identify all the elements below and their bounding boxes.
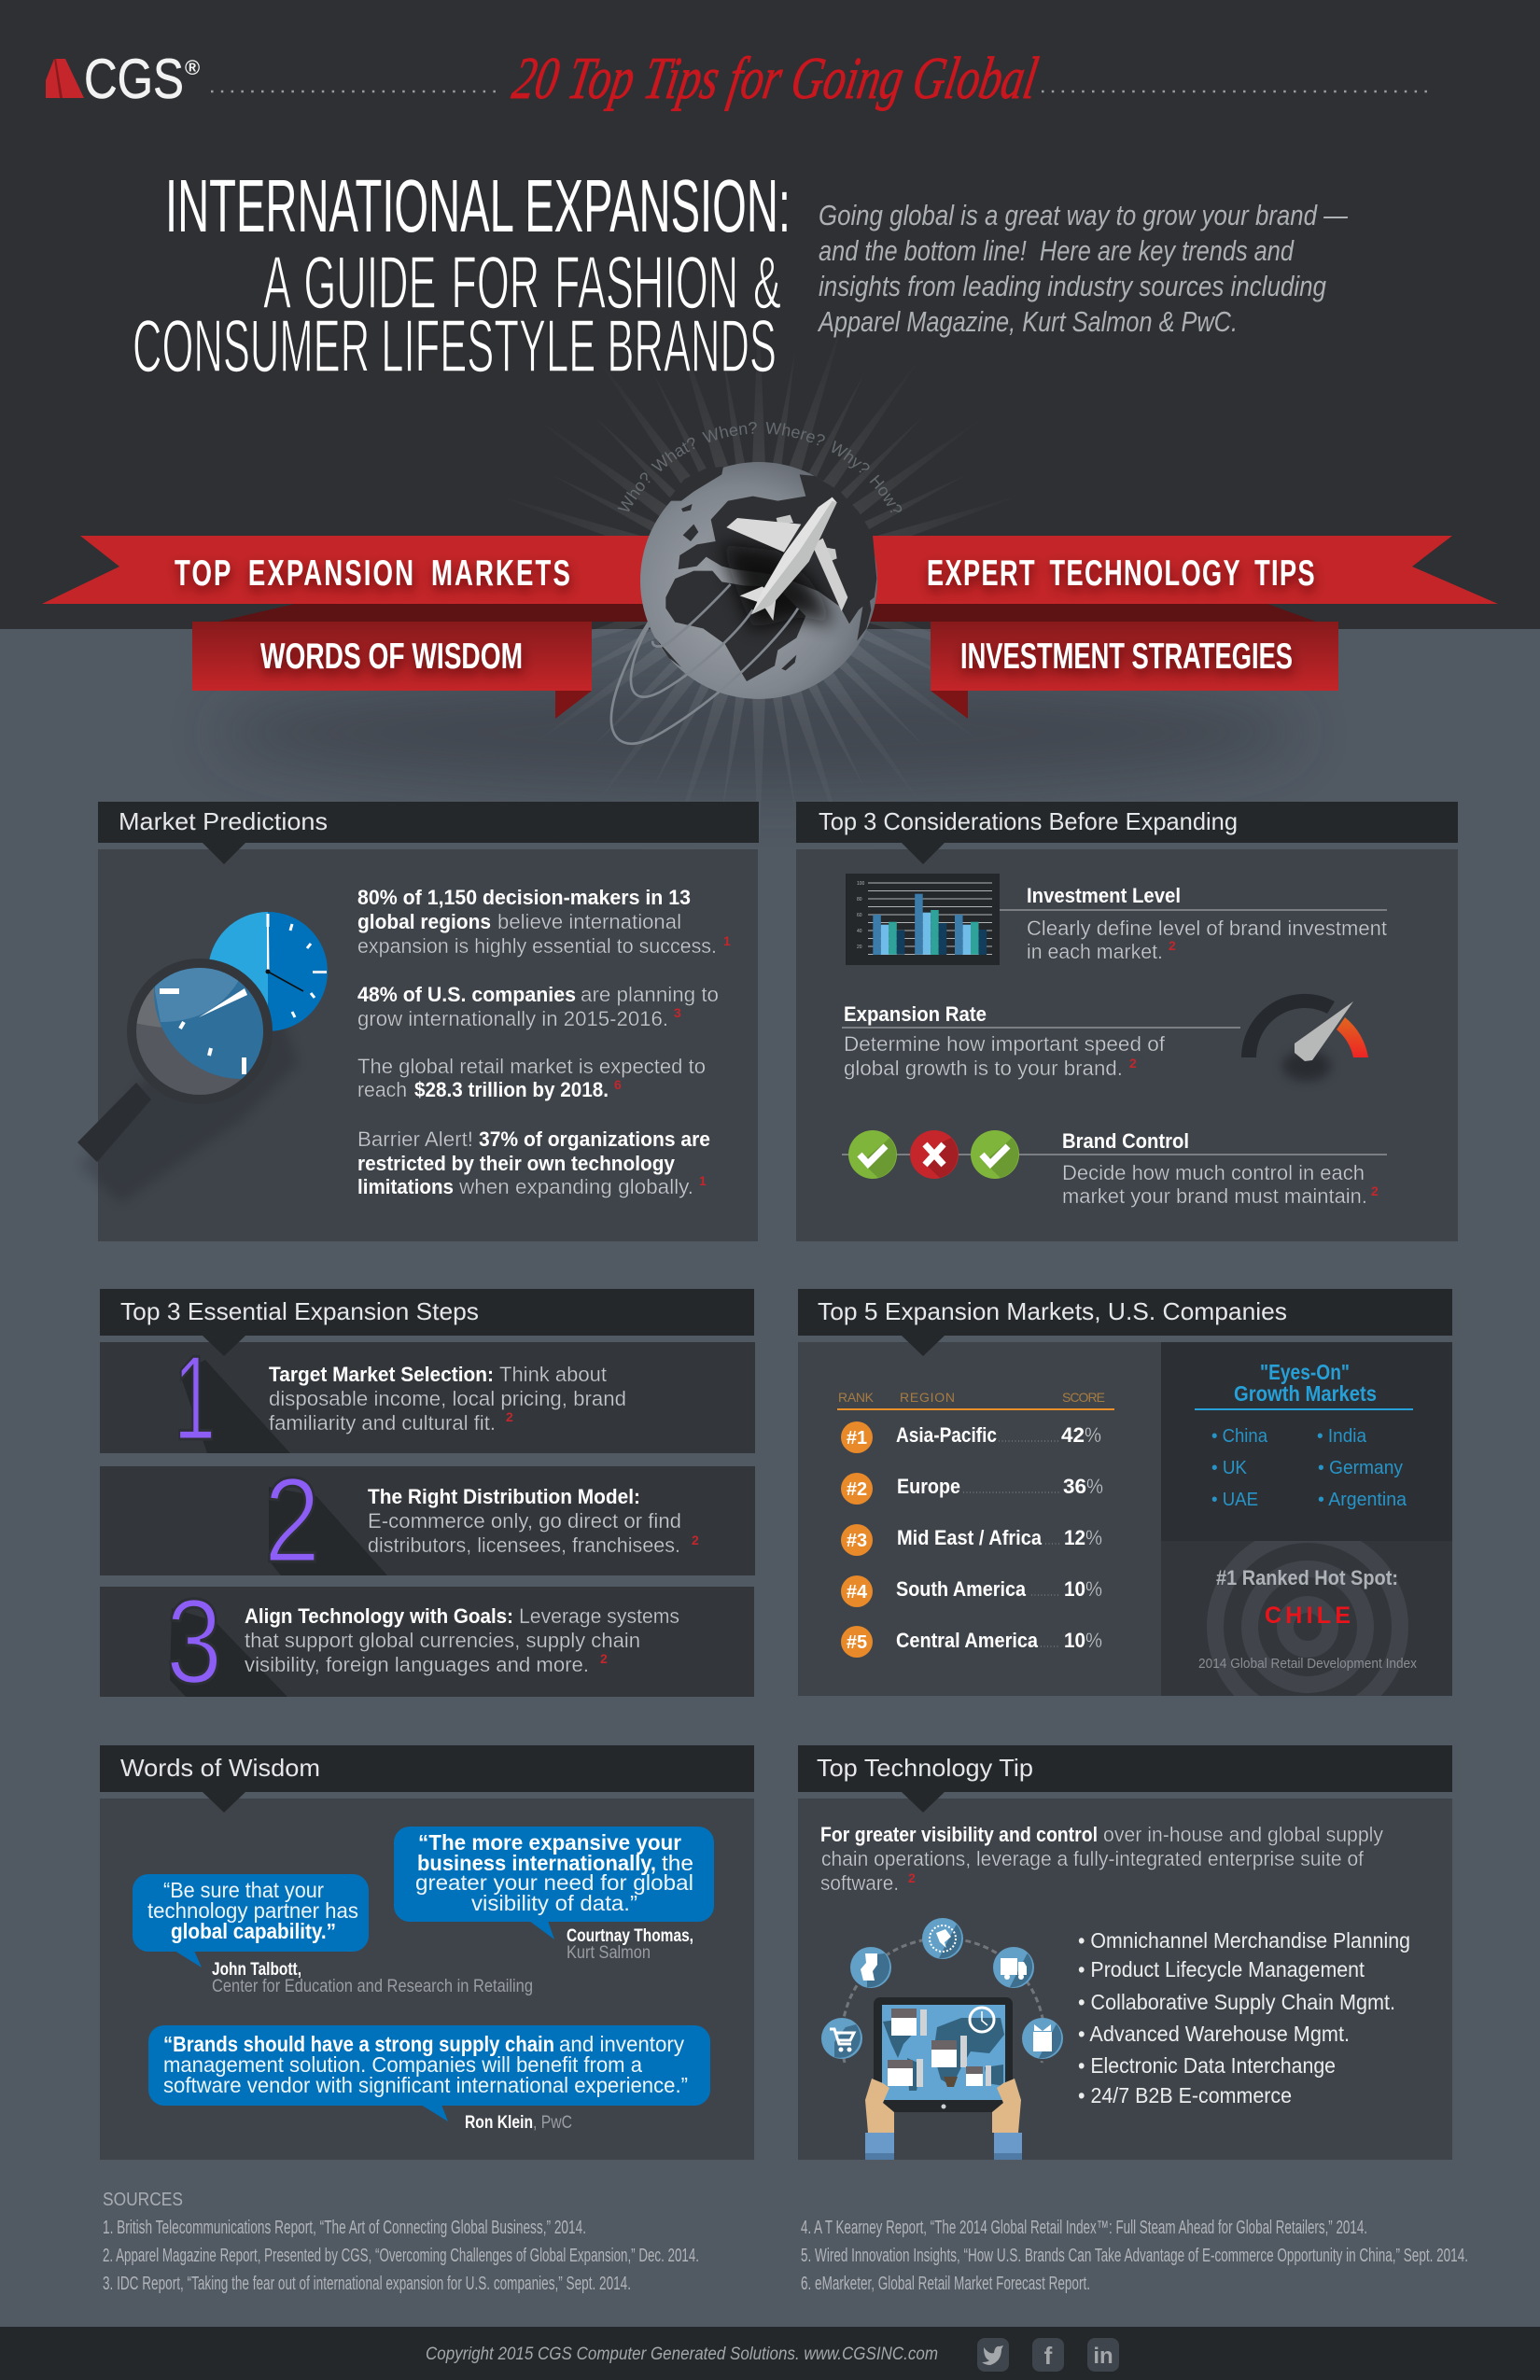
step 2: distributors, licensees, franchisees. <box>368 1533 680 1557</box>
list: software capabilities: • Product Lifecycle Management <box>1078 1957 1365 1981</box>
text block: investment level: Investment Level <box>1027 884 1181 907</box>
icon: clock and magnifier <box>77 903 329 1204</box>
icon: check, cross, check badges <box>842 1130 1387 1179</box>
text block: brand control: Decide how much control in each <box>1062 1161 1365 1184</box>
chart: bar chart icon: 40 <box>857 929 862 934</box>
table: ranked regions: % <box>1085 1629 1102 1652</box>
text block: expansion rate: global growth is to your brand. <box>844 1057 1123 1080</box>
list: software capabilities: • 24/7 B2B E-commerce <box>1078 2083 1292 2107</box>
text block: expansion rate <box>842 1002 1240 1080</box>
step 1: Target Market Selection: <box>269 1363 494 1386</box>
copyright: Copyright 2015 CGS Computer Generated Solutions. www.CGSINC.com <box>426 2345 938 2364</box>
step 2 <box>100 1453 755 1588</box>
text block: investment level <box>1000 884 1387 963</box>
intro paragraph: Going global is a great way to grow your brand — <box>819 199 1349 231</box>
table: ranked regions: #5 <box>847 1632 867 1653</box>
heading: top technology tip: Top Technology Tip <box>817 1754 1033 1782</box>
quote bubble: John Talbott <box>133 1874 369 1967</box>
quote bubble: John Talbott: technology partner has <box>147 1898 358 1923</box>
step 2: 2 <box>692 1533 699 1547</box>
heading: expansion steps: Top 3 Essential Expansion Steps <box>120 1297 479 1325</box>
quote bubble: John Talbott: global capability.” <box>171 1919 336 1943</box>
text block: market statistics: limitations <box>357 1175 454 1198</box>
panel: eyes-on growth markets <box>1161 1342 1452 1541</box>
text block: market statistics: $28.3 trillion by 2018. <box>414 1078 609 1101</box>
quote bubble: Courtnay Thomas: visibility of data.” <box>471 1891 637 1915</box>
icon: hands holding tablet <box>865 2079 1022 2160</box>
chart: bar chart icon <box>846 874 1000 965</box>
list: software capabilities <box>1078 1928 1410 2107</box>
chart: bar chart icon: 60 <box>857 913 862 918</box>
sources list: 1. British Telecommunications Report, “The Art of Connecting Global Business,” 2014. <box>103 2218 586 2238</box>
text block: brand control: Brand Control <box>1062 1129 1189 1153</box>
text block: market statistics: reach <box>357 1078 407 1101</box>
attribution: Ron Klein: Ron Klein <box>465 2113 533 2133</box>
text block: brand control: market your brand must maintain. <box>1062 1184 1367 1208</box>
icon: cart <box>821 2018 862 2059</box>
text block: market statistics: 48% of U.S. companies <box>357 983 576 1006</box>
text block: investment level: Clearly define level of brand investment <box>1027 917 1387 940</box>
step 3: 2 <box>600 1651 608 1666</box>
list: software capabilities: • Advanced Warehouse Mgmt. <box>1078 2022 1350 2046</box>
ribbon: top expansion markets <box>42 536 672 622</box>
globe with airplane <box>611 462 877 744</box>
text block: market statistics: 1 <box>723 933 731 948</box>
table: ranked regions: 12 <box>1064 1526 1085 1549</box>
text block: market statistics: 37% of organizations are <box>479 1127 710 1151</box>
text block: tech tip intro: chain operations, leverage a fully-integrated enterprise suite of <box>821 1847 1365 1870</box>
text block: market statistics: expansion is highly essential to success. <box>357 934 717 958</box>
text block: brand control <box>1062 1129 1379 1208</box>
text block: tech tip intro: over in-house and global supply <box>1103 1823 1383 1846</box>
text block: expansion rate: 2 <box>1129 1056 1137 1071</box>
text block: market statistics: Barrier Alert! <box>357 1127 473 1151</box>
main title: A GUIDE FOR FASHION & <box>263 241 781 324</box>
panel: top 3 essential expansion steps <box>100 1289 755 1709</box>
arc text: question words: Who? What? When? Where? Why? How? <box>618 422 902 513</box>
icon: gift <box>1022 2018 1063 2059</box>
attribution: Courtnay Thomas <box>567 1926 693 1963</box>
table: ranked regions: Europe <box>897 1475 960 1498</box>
heading: considerations: Top 3 Considerations Before Expanding <box>819 807 1238 835</box>
intro paragraph: Apparel Magazine, Kurt Salmon & PwC. <box>817 305 1238 338</box>
panel: top 5 expansion markets <box>798 1289 1452 1719</box>
panel: eyes-on growth markets: • UAE <box>1211 1490 1258 1510</box>
quote bubble: Courtnay Thomas: “The more expansive your <box>418 1830 681 1855</box>
orbit rings <box>611 584 798 744</box>
ribbon: investment strategies <box>931 622 1338 719</box>
text block: investment level: in each market. <box>1027 940 1163 963</box>
text block: market statistics: believe international <box>497 910 681 933</box>
step 3: Leverage systems <box>519 1604 679 1628</box>
table: ranked regions: % <box>1085 1577 1102 1601</box>
step 3: Align Technology with Goals: <box>245 1604 513 1628</box>
quote bubble: Ron Klein: “Brands should have a strong supply chain <box>163 2032 554 2056</box>
attribution: John Talbott <box>212 1960 533 1996</box>
text block: market statistics: are planning to <box>581 983 719 1006</box>
table: ranked regions: % <box>1085 1423 1101 1447</box>
step 1: familiarity and cultural fit. <box>269 1411 496 1435</box>
panel: eyes-on growth markets: • Argentina <box>1318 1490 1407 1510</box>
panel: eyes-on growth markets: Growth Markets <box>1234 1381 1377 1406</box>
sources list <box>103 2190 1468 2294</box>
text block: market statistics: restricted by their own technology <box>357 1152 676 1175</box>
table: ranked regions: Central America <box>896 1629 1039 1652</box>
chart: bar chart icon: 20 <box>857 945 862 950</box>
panel: top technology tip <box>798 1745 1452 2160</box>
table: ranked regions: 10 <box>1064 1577 1085 1601</box>
lower slate background <box>0 629 1540 2327</box>
icon: speedometer gauge <box>1241 994 1368 1081</box>
upper dark background <box>0 0 1540 629</box>
table: ranked regions: Mid East / Africa <box>897 1526 1043 1549</box>
main title: CONSUMER LIFESTYLE BRANDS <box>133 304 777 387</box>
main title <box>133 164 791 387</box>
airplane <box>726 497 847 621</box>
icon: linkedin <box>1087 2338 1119 2372</box>
table: ranked regions: #1 <box>847 1428 867 1449</box>
table: ranked regions: RANK <box>838 1390 875 1405</box>
footer bar <box>0 2327 1540 2380</box>
icon: tablet <box>874 1997 1013 2112</box>
text block: tech tip intro <box>820 1823 1383 1895</box>
icon: apparel <box>850 1947 891 1988</box>
panel: words of wisdom <box>100 1745 754 2160</box>
attribution: John Talbott: John Talbott, <box>212 1960 301 1980</box>
text block: market statistics: 3 <box>674 1005 681 1020</box>
icon: twitter <box>977 2338 1009 2372</box>
attribution: Ron Klein: , PwC <box>533 2113 572 2133</box>
panel: ranked hot spot <box>1161 1541 1452 1696</box>
logo: CGS: CGS <box>84 48 184 110</box>
text block: market statistics: 1 <box>699 1173 707 1188</box>
step 3: visibility, foreign languages and more. <box>245 1653 589 1676</box>
step 1: disposable income, local pricing, brand <box>269 1387 626 1410</box>
icon: facebook <box>1032 2338 1064 2372</box>
text block: tech tip intro: software. <box>820 1871 899 1895</box>
list: software capabilities: • Collaborative Supply Chain Mgmt. <box>1078 1990 1395 2014</box>
icon: linkedin: in <box>1093 2344 1113 2369</box>
step 2: The Right Distribution Model: <box>368 1485 640 1508</box>
panel: top 3 considerations <box>796 802 1458 1241</box>
panel: eyes-on growth markets: "Eyes-On" <box>1260 1360 1350 1384</box>
quote bubble: Ron Klein: management solution. Companies will benefit from a <box>163 2052 642 2077</box>
sources list: 6. eMarketer, Global Retail Market Forecast Report. <box>801 2274 1090 2294</box>
text block: brand control: 2 <box>1371 1183 1379 1198</box>
panel: ranked hot spot: #1 Ranked Hot Spot: <box>1216 1566 1398 1589</box>
globe continents <box>655 467 876 681</box>
ribbon: expert technology tips: EXPERT TECHNOLOGY TIPS <box>927 553 1316 594</box>
step 1: Think about <box>499 1363 607 1386</box>
table: ranked regions: #4 <box>847 1582 868 1603</box>
chart: bar chart icon: 80 <box>857 897 862 903</box>
shadow beneath the ribbons <box>217 677 1300 789</box>
quote bubble: Courtnay Thomas: the <box>662 1851 693 1875</box>
logo: CGS: ® <box>185 56 200 79</box>
text block: expansion rate: Determine how important speed of <box>844 1032 1166 1056</box>
text block: tech tip intro: 2 <box>908 1870 916 1885</box>
quote bubble: John Talbott: “Be sure that your <box>163 1878 324 1902</box>
step 1: 1 <box>174 1331 216 1465</box>
table: ranked regions: REGION <box>900 1390 955 1405</box>
panel: ranked hot spot: 2014 Global Retail Development Index <box>1198 1656 1417 1672</box>
heading: market predictions: Market Predictions <box>119 807 328 835</box>
step 1: 2 <box>506 1409 513 1424</box>
step 3 <box>100 1575 754 1709</box>
attribution: Courtnay Thomas: Kurt Salmon <box>567 1943 651 1963</box>
text block: market statistics: grow internationally in 2015-2016. <box>357 1007 668 1030</box>
step 3: that support global currencies, supply chain <box>245 1629 640 1652</box>
sources list: 3. IDC Report, “Taking the fear out of international expansion for U.S. companies,” Sept. 2014. <box>103 2274 631 2294</box>
table: ranked regions: South America <box>896 1577 1027 1601</box>
step 2: 2 <box>264 1453 320 1588</box>
ribbon: words of wisdom <box>192 622 592 719</box>
text block: market statistics: when expanding globally. <box>458 1175 693 1198</box>
chart: bar chart icon: 100 <box>857 881 865 887</box>
ribbon: expert technology tips <box>849 536 1498 622</box>
heading: top 5 markets: Top 5 Expansion Markets, U.S. Companies <box>818 1297 1287 1325</box>
heading: words of wisdom: Words of Wisdom <box>120 1754 320 1782</box>
panel: eyes-on growth markets: • Germany <box>1318 1458 1403 1478</box>
sources list: SOURCES <box>103 2190 183 2210</box>
table: ranked regions: #3 <box>847 1531 867 1551</box>
table: ranked regions: % <box>1085 1526 1102 1549</box>
ribbon: investment strategies: INVESTMENT STRATEGIES <box>960 637 1293 677</box>
icon: truck <box>993 1947 1034 1988</box>
quote bubble: Ron Klein <box>148 2025 710 2121</box>
sources list: 2. Apparel Magazine Report, Presented by CGS, “Overcoming Challenges of Global Expansion,” Dec. 2014. <box>103 2246 699 2266</box>
table: ranked regions: % <box>1086 1475 1103 1498</box>
attribution: Courtnay Thomas: Courtnay Thomas, <box>567 1926 693 1946</box>
ribbon: words of wisdom: WORDS OF WISDOM <box>260 637 523 677</box>
panel: eyes-on growth markets: • China <box>1211 1426 1268 1447</box>
panel: eyes-on growth markets: • UK <box>1211 1458 1248 1478</box>
text block: market statistics: The global retail market is expected to <box>357 1055 706 1078</box>
panel: ranked hot spot: CHILE <box>1265 1603 1351 1629</box>
ribbon: top expansion markets: TOP EXPANSION MARKETS <box>175 553 572 594</box>
list: software capabilities: • Omnichannel Merchandise Planning <box>1078 1928 1410 1953</box>
text block: market statistics: global regions <box>357 910 491 933</box>
quote bubble: Courtnay Thomas <box>394 1827 714 1939</box>
tagline with dotted leaders: 20 Top Tips for Going Global <box>509 45 1043 111</box>
text block: market statistics: 6 <box>614 1077 622 1092</box>
table: ranked regions <box>837 1390 1114 1658</box>
quote bubble: Courtnay Thomas: business internationally, <box>417 1851 656 1875</box>
panel: eyes-on growth markets: • India <box>1317 1426 1367 1447</box>
table: ranked regions: Asia-Pacific <box>896 1423 997 1447</box>
intro paragraph <box>817 199 1349 338</box>
icon: globe dial <box>922 1918 963 1959</box>
quote bubble: Ron Klein: and inventory <box>559 2032 684 2056</box>
plane shadow <box>721 544 833 628</box>
table: ranked regions: 42 <box>1061 1423 1085 1447</box>
attribution: John Talbott: Center for Education and Research in Retailing <box>212 1977 533 1996</box>
main title: INTERNATIONAL EXPANSION: <box>165 164 791 247</box>
text block: market statistics <box>357 886 731 1198</box>
quote bubble: Ron Klein: software vendor with significant international experience.” <box>163 2073 688 2097</box>
list: software capabilities: • Electronic Data Interchange <box>1078 2053 1336 2078</box>
intro paragraph: and the bottom line! Here are key trends and <box>819 234 1295 267</box>
table: ranked regions: SCORE <box>1062 1390 1105 1405</box>
text block: expansion rate: Expansion Rate <box>844 1002 987 1026</box>
step 3: 3 <box>166 1575 222 1709</box>
table: ranked regions: 10 <box>1064 1629 1085 1652</box>
step 2: E-commerce only, go direct or find <box>368 1509 681 1533</box>
illustration: tablet with connected icons <box>821 1918 1063 2160</box>
table: ranked regions: #2 <box>847 1479 867 1500</box>
quote bubble: Courtnay Thomas: greater your need for global <box>415 1870 693 1895</box>
intro paragraph: insights from leading industry sources including <box>819 270 1326 302</box>
text block: tech tip intro: For greater visibility and control <box>820 1823 1098 1846</box>
text block: investment level: 2 <box>1169 938 1176 953</box>
icon: facebook: f <box>1044 2342 1053 2370</box>
panel: market predictions <box>77 802 759 1241</box>
table: ranked regions: 36 <box>1063 1475 1086 1498</box>
step 1 <box>100 1331 755 1465</box>
sunburst rays behind globe <box>479 301 1039 861</box>
text block: market statistics: 80% of 1,150 decision-makers in 13 <box>357 886 691 909</box>
